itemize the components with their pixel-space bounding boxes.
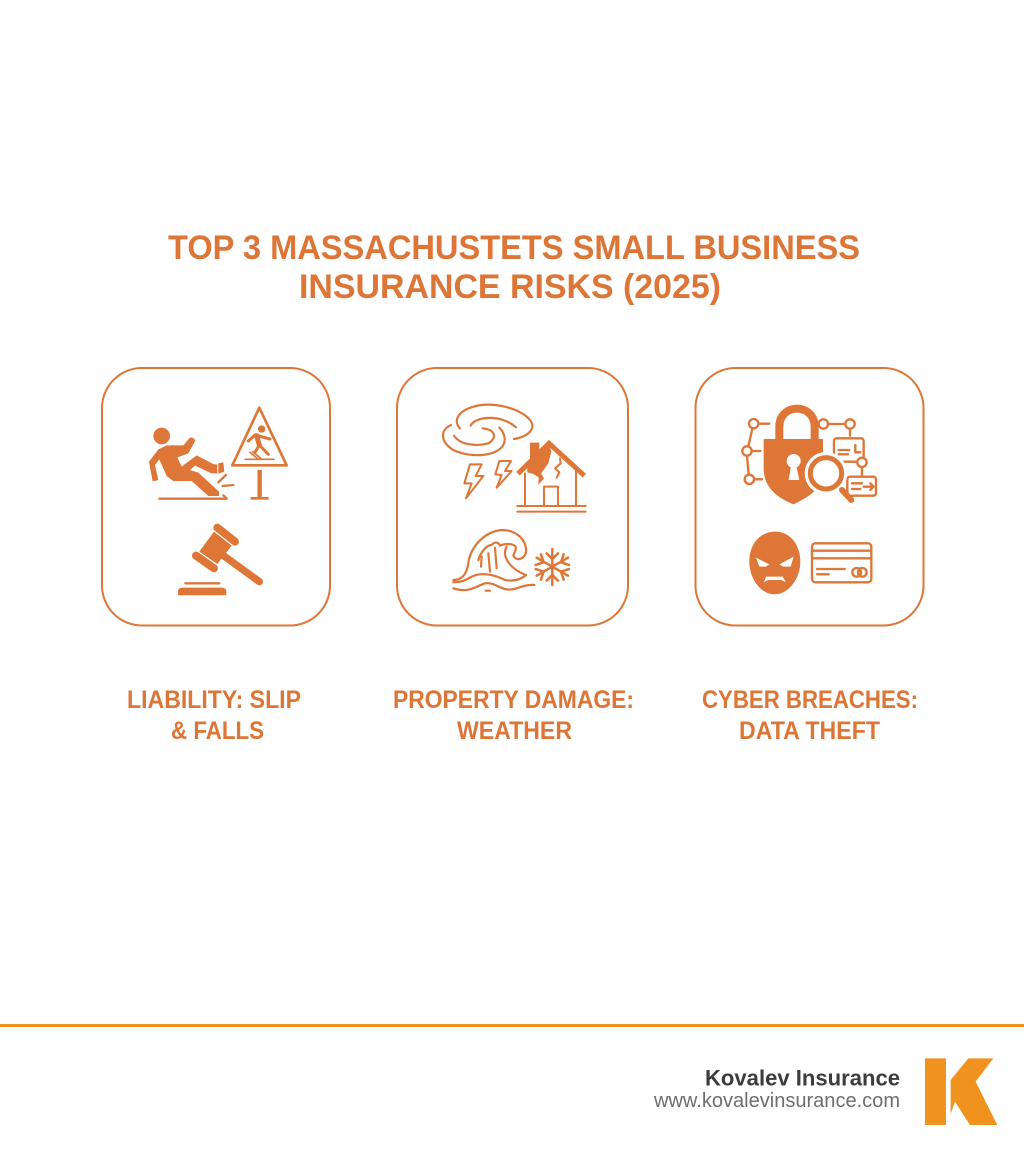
label: cyber breaches: DATA THEFT [739,717,880,745]
footer brand text: www.kovalevinsurance.com [653,1090,900,1112]
icon: snowflake [536,549,569,585]
label: property damage [393,686,634,745]
panel: property damage [397,368,628,626]
title [168,229,860,306]
title: INSURANCE RISKS (2025) [299,268,721,306]
icon: gavel [178,528,259,595]
icon: wave [453,530,534,591]
panel: liability [102,368,330,626]
label: liability: & FALLS [171,717,264,745]
footer brand text [653,1066,900,1112]
icon: padlock shield with magnifier [764,409,851,504]
icon: falling person [149,428,233,499]
label: property damage: PROPERTY DAMAGE: [393,686,634,714]
icon: wet floor warning sign [232,408,287,498]
label: cyber breaches: CYBER BREACHES: [702,686,918,714]
icon: network nodes [742,419,876,496]
panel: cyber breaches [696,368,924,626]
label: liability: LIABILITY: SLIP [127,686,301,714]
label: property damage: WEATHER [457,717,572,745]
footer rule [0,1024,1024,1027]
icon: credit card [812,543,871,582]
icon: thief mask [749,532,800,594]
icon: damaged house [517,443,586,512]
logo: K mark [925,1058,997,1125]
title: TOP 3 MASSACHUSTETS SMALL BUSINESS [168,229,860,267]
icon: lightning bolts [464,461,512,498]
label: cyber breaches [702,686,918,745]
label: liability [127,686,301,745]
footer brand text: Kovalev Insurance [705,1066,900,1090]
icon: storm swirl [443,405,532,455]
